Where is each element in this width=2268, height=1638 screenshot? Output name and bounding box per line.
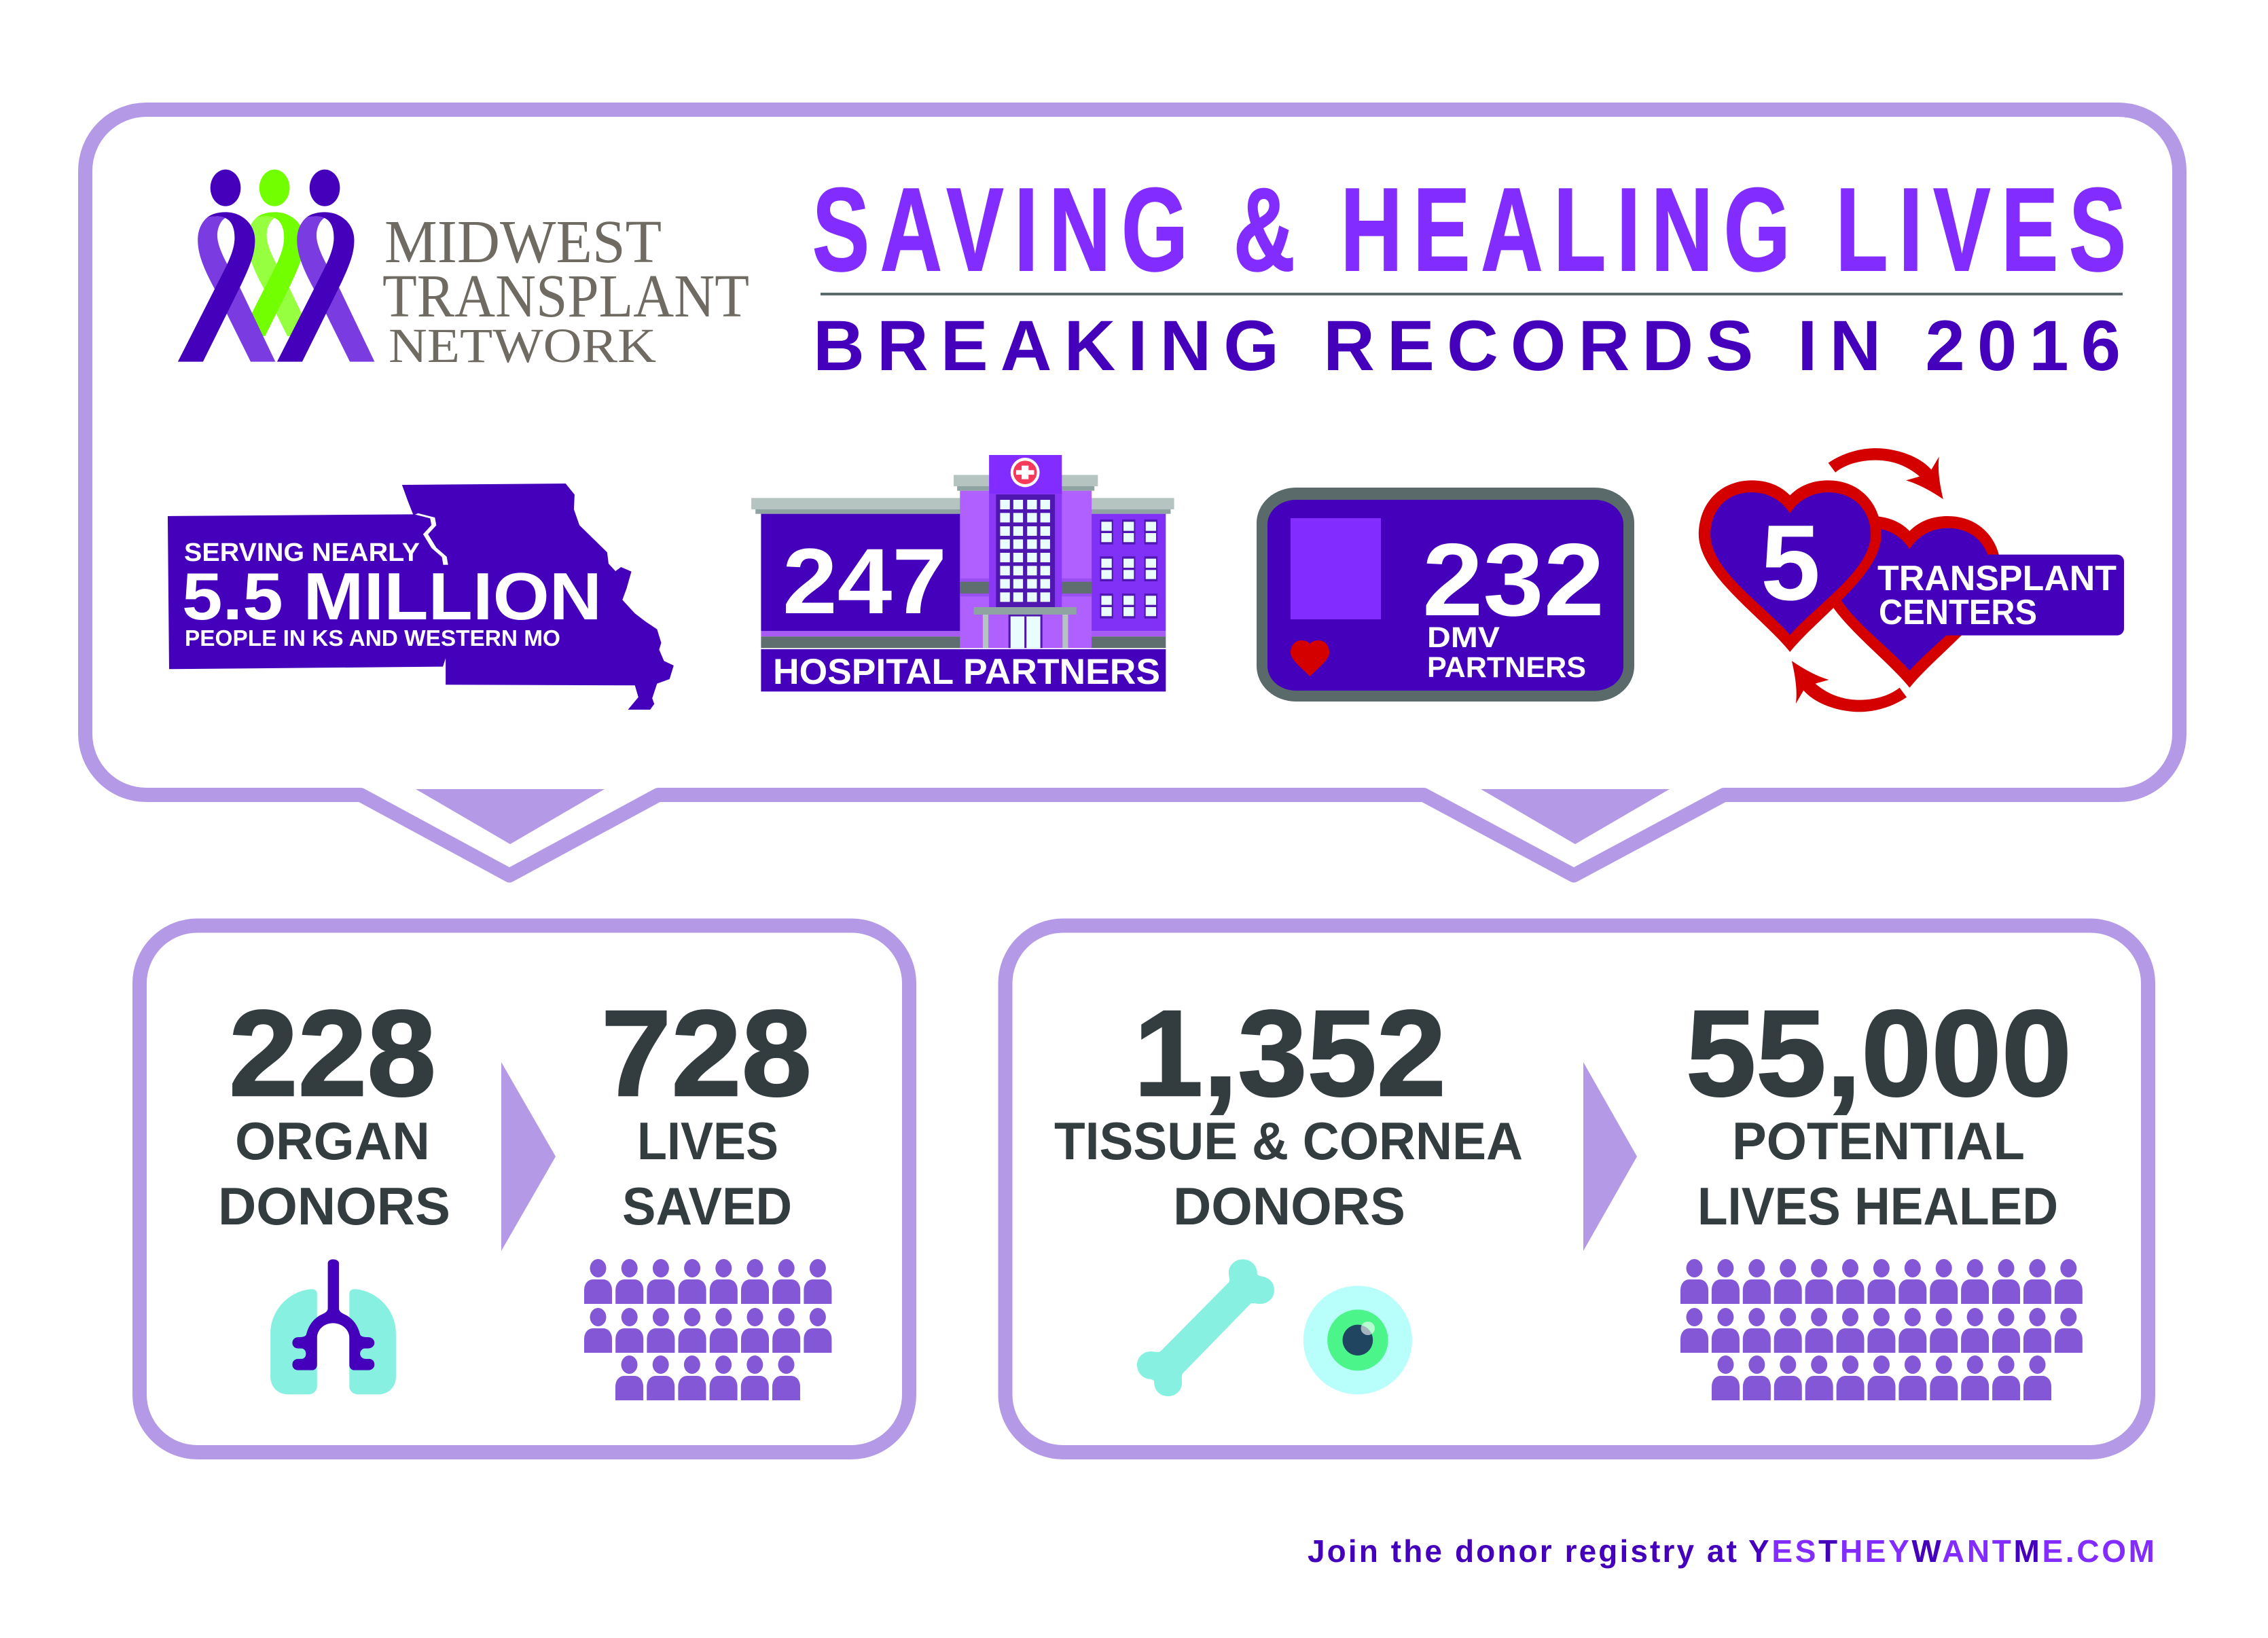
panel border: [1005, 926, 2148, 1452]
label: partners: PARTNERS: [1427, 651, 1586, 684]
panel border: [140, 926, 909, 1452]
label: lives: LIVES: [637, 1111, 778, 1171]
number: 1,352: 1,352: [1134, 985, 1446, 1122]
label: potential: POTENTIAL: [1732, 1111, 2025, 1171]
number: 5: 5: [1761, 503, 1820, 623]
card body: [1267, 500, 1623, 691]
label: centers: CENTERS: [1879, 593, 2037, 632]
hospital illustration with stat: [751, 455, 1174, 692]
label: organ: ORGAN: [235, 1111, 430, 1171]
label: lives healed: LIVES HEALED: [1697, 1176, 2058, 1236]
footer call to action: [1308, 1533, 2155, 1569]
label: hospital partners: HOSPITAL PARTNERS: [773, 652, 1160, 692]
subtitle: BREAKING RECORDS IN 2016: [813, 306, 2121, 386]
label: tissue and cornea: TISSUE & CORNEA: [1054, 1111, 1523, 1171]
panel: organ donors: [140, 926, 909, 1452]
text: serving nearly: SERVING NEARLY: [184, 539, 420, 567]
logo: Midwest Transplant Network: [178, 170, 749, 373]
label: donors: DONORS: [1173, 1176, 1405, 1236]
text: people in KS and western MO: PEOPLE IN KS AND WESTERN MO: [185, 625, 560, 651]
main speech bubble panel: [86, 110, 2179, 875]
label: transplant: TRANSPLANT: [1877, 559, 2117, 598]
right pointer triangle: [1481, 789, 1670, 844]
number: 247: 247: [782, 530, 947, 634]
number: 228: 228: [229, 985, 436, 1122]
icon: eye: [1303, 1286, 1412, 1394]
arrow: [1583, 1062, 1637, 1251]
arrow: [501, 1062, 556, 1251]
DMV driver license card: [1257, 488, 1634, 702]
icon: lungs: [270, 1259, 396, 1394]
footer text: join the donor registry: Join the donor registry at: [1308, 1533, 1737, 1569]
map of Missouri and Kansas with population stat: [168, 484, 674, 710]
icon: crowd of lives saved: [584, 1259, 831, 1400]
footer text: website: YESTHEYWANTME.COM: [1748, 1533, 2155, 1569]
number: 55,000: 55,000: [1686, 985, 2072, 1122]
card photo: [1291, 518, 1381, 619]
icon: crowd of lives healed: [1680, 1259, 2083, 1400]
icon: small heart: [1291, 640, 1329, 676]
logo text: Transplant: TRANSPLANT: [382, 263, 749, 330]
left pointer triangle: [416, 789, 605, 844]
panel: tissue and cornea donors: [1005, 926, 2148, 1452]
logo text: Midwest: MIDWEST: [384, 208, 662, 276]
number: 232: 232: [1422, 522, 1604, 638]
label: DMV: DMV: [1427, 621, 1500, 654]
transplant centers hearts: [1699, 448, 2124, 712]
map shape: [168, 484, 674, 710]
hospital building: [751, 455, 1174, 691]
logo text: Network: NETWORK: [389, 318, 656, 373]
text: 5.5 million: 5.5 MILLION: [182, 559, 602, 634]
number: 728: 728: [601, 985, 812, 1122]
hearts and arrows: [1699, 448, 2124, 712]
label: saved: SAVED: [622, 1176, 792, 1236]
label: donors: DONORS: [218, 1176, 450, 1236]
card border: [1257, 488, 1634, 702]
logo ribbons and heads: [178, 170, 374, 362]
icon: bone: [1137, 1259, 1274, 1396]
